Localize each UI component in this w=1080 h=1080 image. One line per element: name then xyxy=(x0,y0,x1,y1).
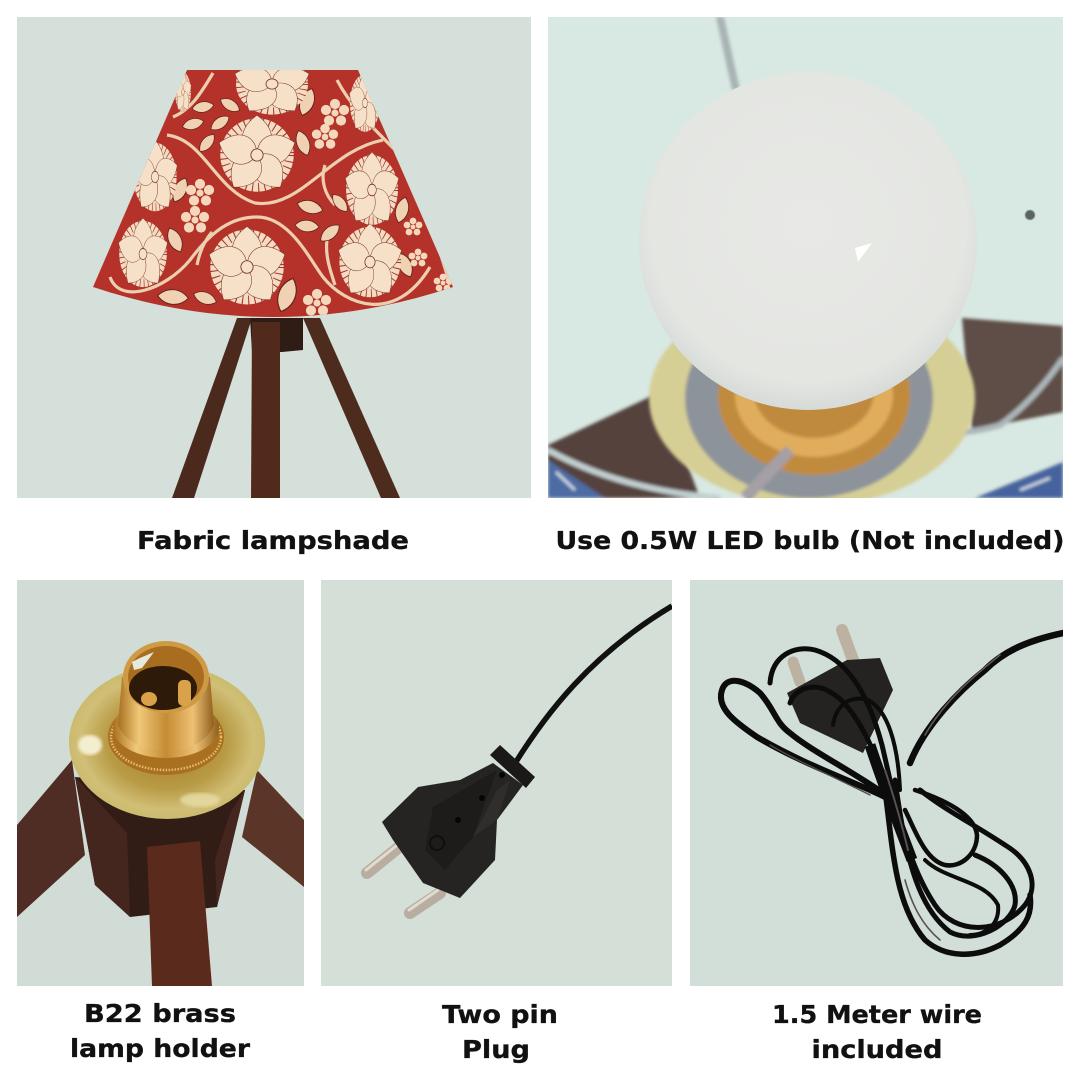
icon: black cable xyxy=(514,606,672,765)
caption: plug xyxy=(442,1000,558,1064)
icon: brass plate and lamp holder xyxy=(646,336,978,498)
icon: brass plate xyxy=(69,665,265,819)
icon: plug pins and head xyxy=(787,630,893,753)
caption: lamp holder: lamp holder xyxy=(70,1034,251,1063)
icon: brass socket xyxy=(108,641,224,775)
panel: two pin plug photo xyxy=(321,580,672,986)
panel: fabric lampshade photo xyxy=(17,17,531,498)
caption: LED bulb: Use 0.5W LED bulb (Not included) xyxy=(556,526,1064,555)
icon: two pin plug xyxy=(382,745,535,898)
panel: LED bulb photo xyxy=(548,17,1063,506)
caption: lamp holder: B22 brass xyxy=(84,999,236,1028)
icon: coiled black wire xyxy=(721,633,1063,954)
panel: 1.5 meter wire photo xyxy=(690,580,1063,986)
caption: wire: 1.5 Meter wire xyxy=(772,1000,982,1029)
caption: lamp holder xyxy=(70,999,251,1063)
icon: wood arms and wire xyxy=(548,17,1063,498)
icon: tripod legs xyxy=(172,318,400,498)
icon: red floral lampshade xyxy=(93,70,453,317)
caption: fabric lampshade: Fabric lampshade xyxy=(137,526,409,555)
caption: plug: Two pin xyxy=(442,1000,558,1029)
icon: frosted white bulb xyxy=(639,72,977,410)
icon: wooden legs xyxy=(17,760,304,986)
panel: brass lamp holder photo xyxy=(17,580,304,986)
caption: wire xyxy=(772,1000,982,1064)
caption: wire: included xyxy=(812,1035,942,1064)
caption: plug: Plug xyxy=(462,1035,530,1064)
icon: plug pins xyxy=(366,846,440,913)
